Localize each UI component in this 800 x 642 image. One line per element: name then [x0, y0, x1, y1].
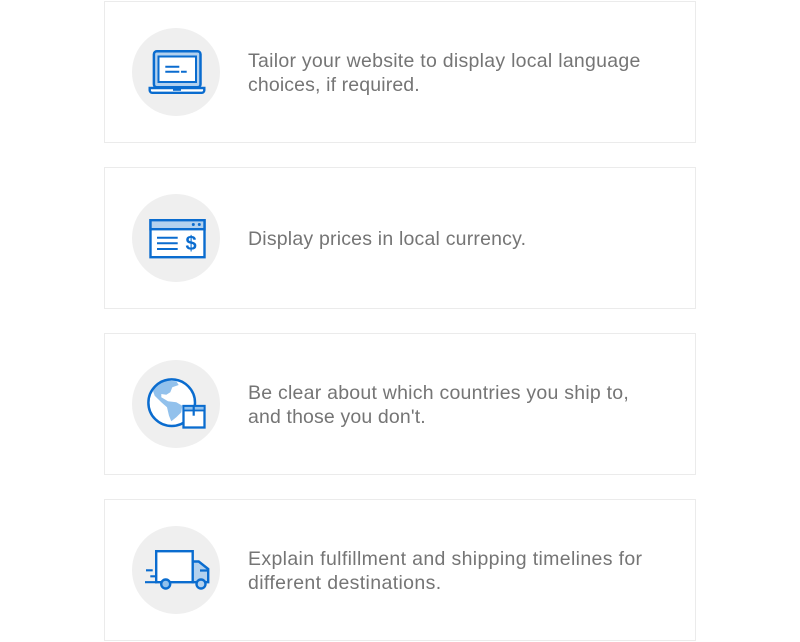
text: shipping timelines: Explain fulfillment and shipping timelines for — [248, 548, 642, 570]
icon background circle — [132, 526, 220, 614]
icon: browser with dollar — [149, 219, 206, 258]
icon background circle — [132, 360, 220, 448]
panel: local language — [104, 1, 696, 143]
text: shipping timelines: different destinations. — [248, 572, 442, 594]
panel: shipping countries — [104, 333, 696, 475]
text: shipping countries: and those you don't. — [248, 406, 426, 428]
icon background circle — [132, 28, 220, 116]
icon: browser with dollar: $ — [185, 233, 196, 255]
text: local currency: Display prices in local currency. — [248, 228, 526, 250]
panel: shipping timelines — [104, 499, 696, 641]
icon: globe with parcel — [147, 378, 206, 429]
panel: local currency — [104, 167, 696, 309]
icon: laptop — [148, 50, 206, 94]
text: shipping timelines — [248, 548, 642, 594]
text: local language — [248, 50, 641, 96]
text: local language: choices, if required. — [248, 74, 420, 96]
text: local language: Tailor your website to display local language — [248, 50, 641, 72]
text: shipping countries — [248, 382, 629, 428]
icon: delivery truck — [145, 550, 210, 590]
text: shipping countries: Be clear about which countries you ship to, — [248, 382, 629, 404]
icon background circle — [132, 194, 220, 282]
